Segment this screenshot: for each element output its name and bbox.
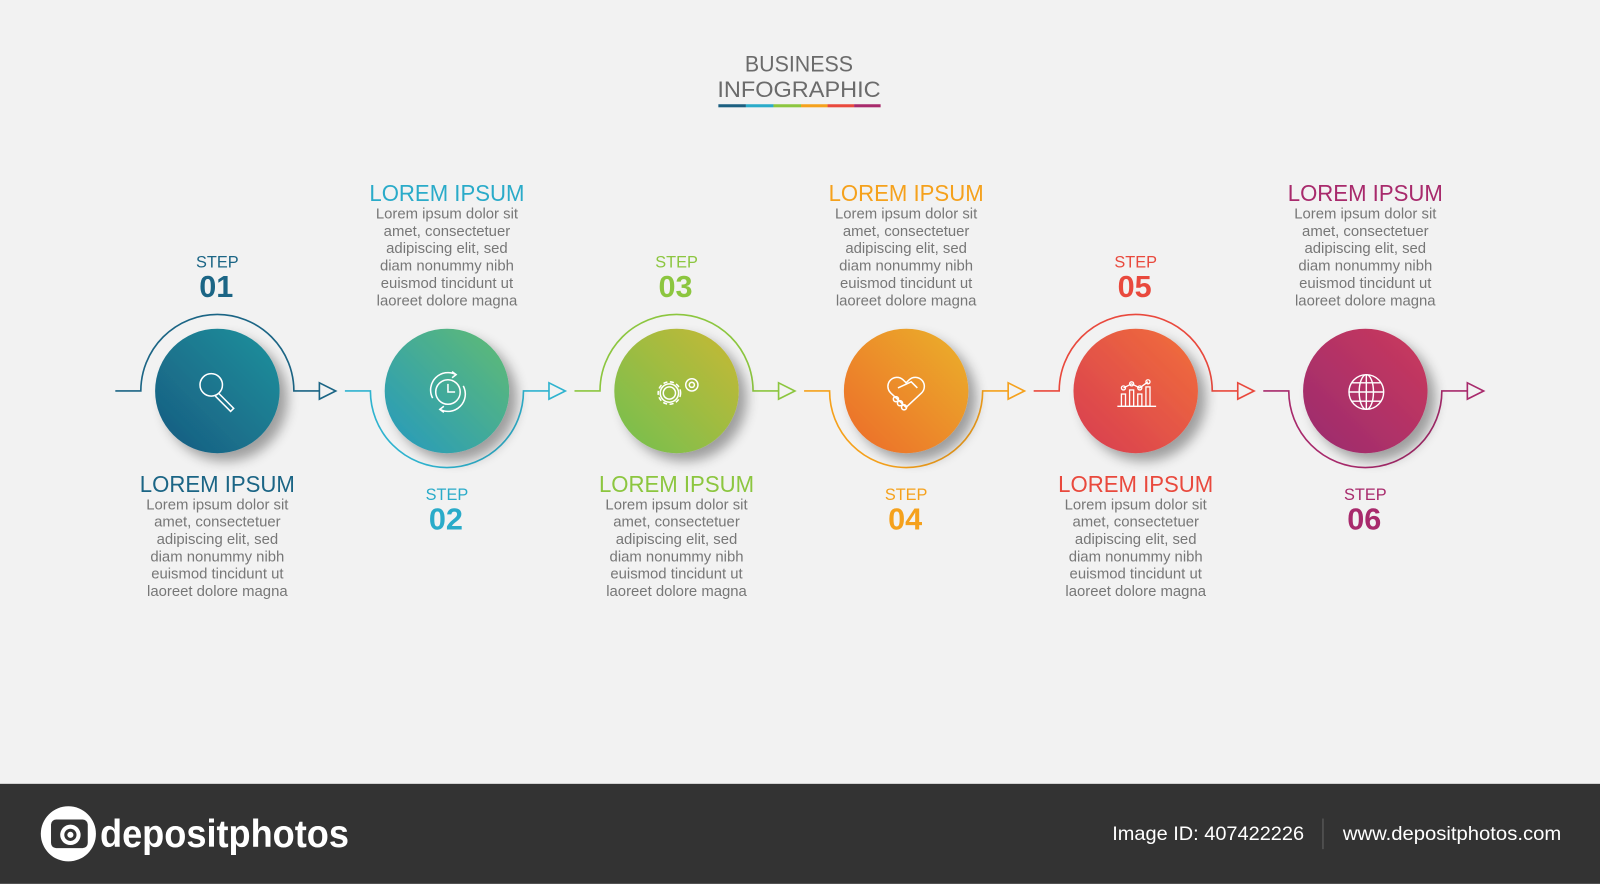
step 03 (574, 254, 795, 600)
text 02: Lorem ipsum dolor sit (376, 207, 519, 223)
step 06 (1263, 180, 1484, 537)
icon: clock (431, 372, 465, 412)
text 01: diam nonummy nibh (150, 549, 284, 565)
step 05 (1034, 254, 1254, 600)
step label 01 (196, 254, 239, 304)
text 05 (1058, 471, 1213, 600)
text 03: adipiscing elit, sed (616, 532, 737, 548)
text 06 (1288, 180, 1443, 309)
icon: magnifier (200, 374, 234, 411)
text 04: Lorem ipsum dolor sit (835, 207, 978, 223)
text 01: LOREM IPSUM (140, 471, 295, 497)
step 04 (804, 180, 1024, 537)
icon: bar chart (1117, 380, 1156, 406)
text 05: euismod tincidunt ut (1070, 567, 1203, 583)
step label 02: STEP (426, 486, 468, 504)
text 03: euismod tincidunt ut (610, 567, 744, 583)
title: BUSINESS (745, 52, 853, 77)
icon: globe (1349, 375, 1384, 409)
text 02: amet, consectetuer (384, 224, 510, 240)
text 06: LOREM IPSUM (1288, 180, 1443, 206)
connector 04 (804, 383, 1024, 468)
step label 03 (655, 254, 698, 304)
text 05: adipiscing elit, sed (1075, 532, 1196, 548)
text 04: euismod tincidunt ut (840, 276, 973, 292)
text 06: laoreet dolore magna (1295, 293, 1436, 309)
circle 03 (614, 329, 739, 453)
text 01: adipiscing elit, sed (157, 532, 278, 548)
circle 04 (844, 329, 968, 453)
connector 05 (1034, 314, 1254, 399)
text 05: Lorem ipsum dolor sit (1065, 497, 1208, 513)
text 02: diam nonummy nibh (380, 259, 514, 275)
step label 01: STEP (196, 254, 239, 272)
circle 06 (1303, 329, 1428, 453)
text 06: amet, consectetuer (1302, 224, 1429, 240)
text 04: LOREM IPSUM (829, 180, 984, 206)
text 06: Lorem ipsum dolor sit (1294, 207, 1437, 223)
connector 03 (574, 314, 795, 399)
step label 04: 04 (888, 503, 922, 537)
text 05: LOREM IPSUM (1058, 471, 1213, 497)
text 04: adipiscing elit, sed (845, 241, 967, 257)
text 02: LOREM IPSUM (369, 180, 524, 206)
text 01: laoreet dolore magna (147, 584, 288, 600)
website: www.depositphotos.com (1342, 823, 1561, 845)
step label 06: 06 (1347, 503, 1381, 537)
icon: camera logo (41, 806, 96, 861)
image id: Image ID: 407422226 (1112, 823, 1304, 845)
text 03: amet, consectetuer (613, 515, 740, 531)
text 06: diam nonummy nibh (1298, 259, 1432, 275)
text 01 (140, 471, 295, 600)
step label 05 (1114, 254, 1157, 304)
icon: handshake (888, 377, 924, 410)
text 03: diam nonummy nibh (610, 549, 744, 565)
footer bar (0, 784, 1600, 884)
text 04: laoreet dolore magna (836, 293, 977, 309)
text 02: euismod tincidunt ut (381, 276, 514, 292)
text 01: amet, consectetuer (154, 515, 281, 531)
step label 03: STEP (655, 254, 698, 272)
step 01 (115, 254, 336, 600)
text 01: euismod tincidunt ut (151, 567, 284, 583)
step label 03: 03 (658, 270, 693, 304)
text 05: diam nonummy nibh (1069, 549, 1203, 565)
text 04: diam nonummy nibh (839, 259, 973, 275)
step label 06: STEP (1344, 486, 1387, 504)
connector 01 (115, 314, 336, 399)
text 01: Lorem ipsum dolor sit (146, 497, 289, 513)
text 03: LOREM IPSUM (599, 471, 754, 497)
connector 02 (345, 383, 565, 468)
step label 02 (426, 486, 468, 537)
step label 04 (885, 486, 928, 537)
logo text: depositphotos (100, 813, 349, 856)
title (717, 52, 881, 107)
step label 02: 02 (429, 503, 463, 537)
text 06: adipiscing elit, sed (1305, 241, 1426, 257)
step label 05: STEP (1114, 254, 1157, 272)
text 03: Lorem ipsum dolor sit (605, 497, 748, 513)
text 03: laoreet dolore magna (606, 584, 748, 600)
connector 06 (1263, 383, 1484, 468)
text 03 (599, 471, 754, 600)
step 02 (345, 180, 565, 537)
text 02 (369, 180, 524, 309)
step label 01: 01 (199, 270, 233, 304)
text 05: laoreet dolore magna (1065, 584, 1207, 600)
step label 04: STEP (885, 486, 928, 504)
text 05: amet, consectetuer (1072, 515, 1199, 531)
circle 01 (155, 329, 280, 453)
circle 02 (385, 329, 509, 453)
text 04 (829, 180, 984, 309)
text 06: euismod tincidunt ut (1299, 276, 1432, 292)
title: INFOGRAPHIC (717, 77, 881, 102)
text 02: laoreet dolore magna (377, 293, 518, 309)
circle 05 (1073, 329, 1198, 453)
step label 06 (1344, 486, 1387, 537)
step label 05: 05 (1118, 270, 1152, 304)
icon: gears (658, 379, 698, 404)
text 02: adipiscing elit, sed (386, 241, 508, 257)
text 04: amet, consectetuer (843, 224, 969, 240)
